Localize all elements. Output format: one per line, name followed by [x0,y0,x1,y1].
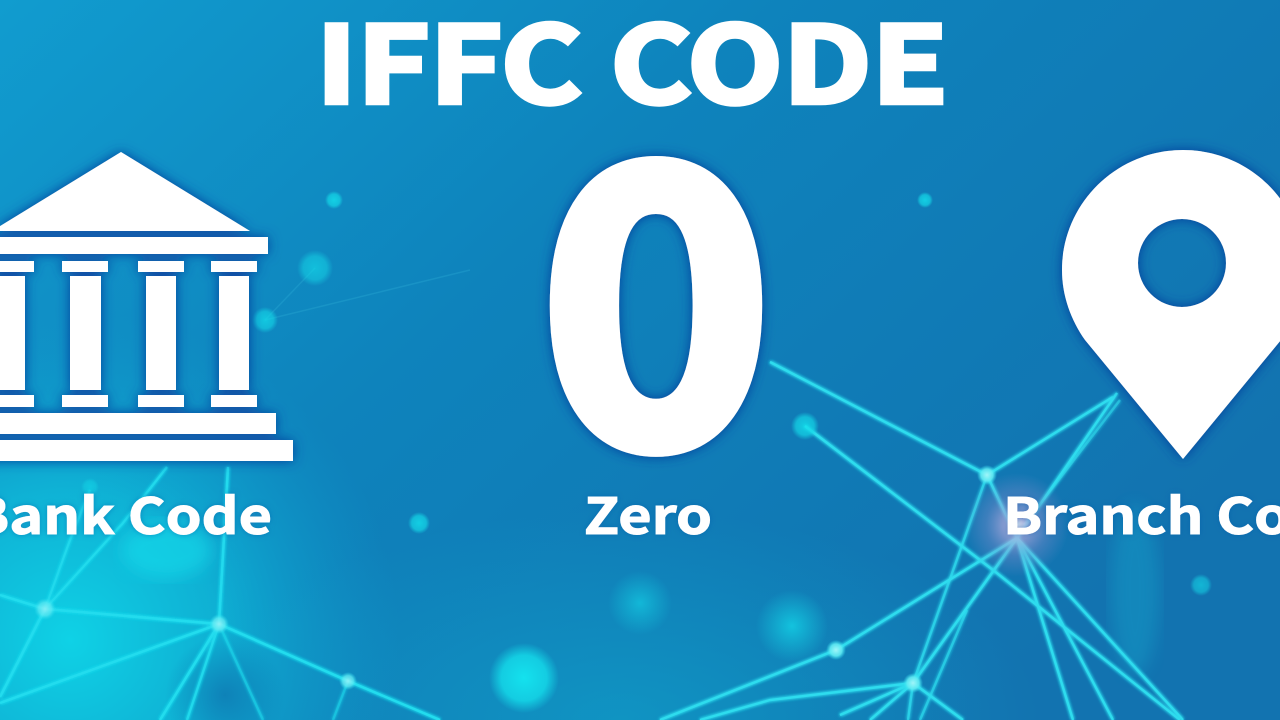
large zero: 0 [540,0,772,555]
network lines: left cluster [0,467,440,720]
network lines: right cluster [660,362,1183,720]
icon: location pin [1062,150,1280,459]
faint upper lines [265,268,470,320]
icon: bank building [0,152,293,461]
glowing nodes [34,191,1212,713]
label: Zero: Zero [584,476,712,549]
